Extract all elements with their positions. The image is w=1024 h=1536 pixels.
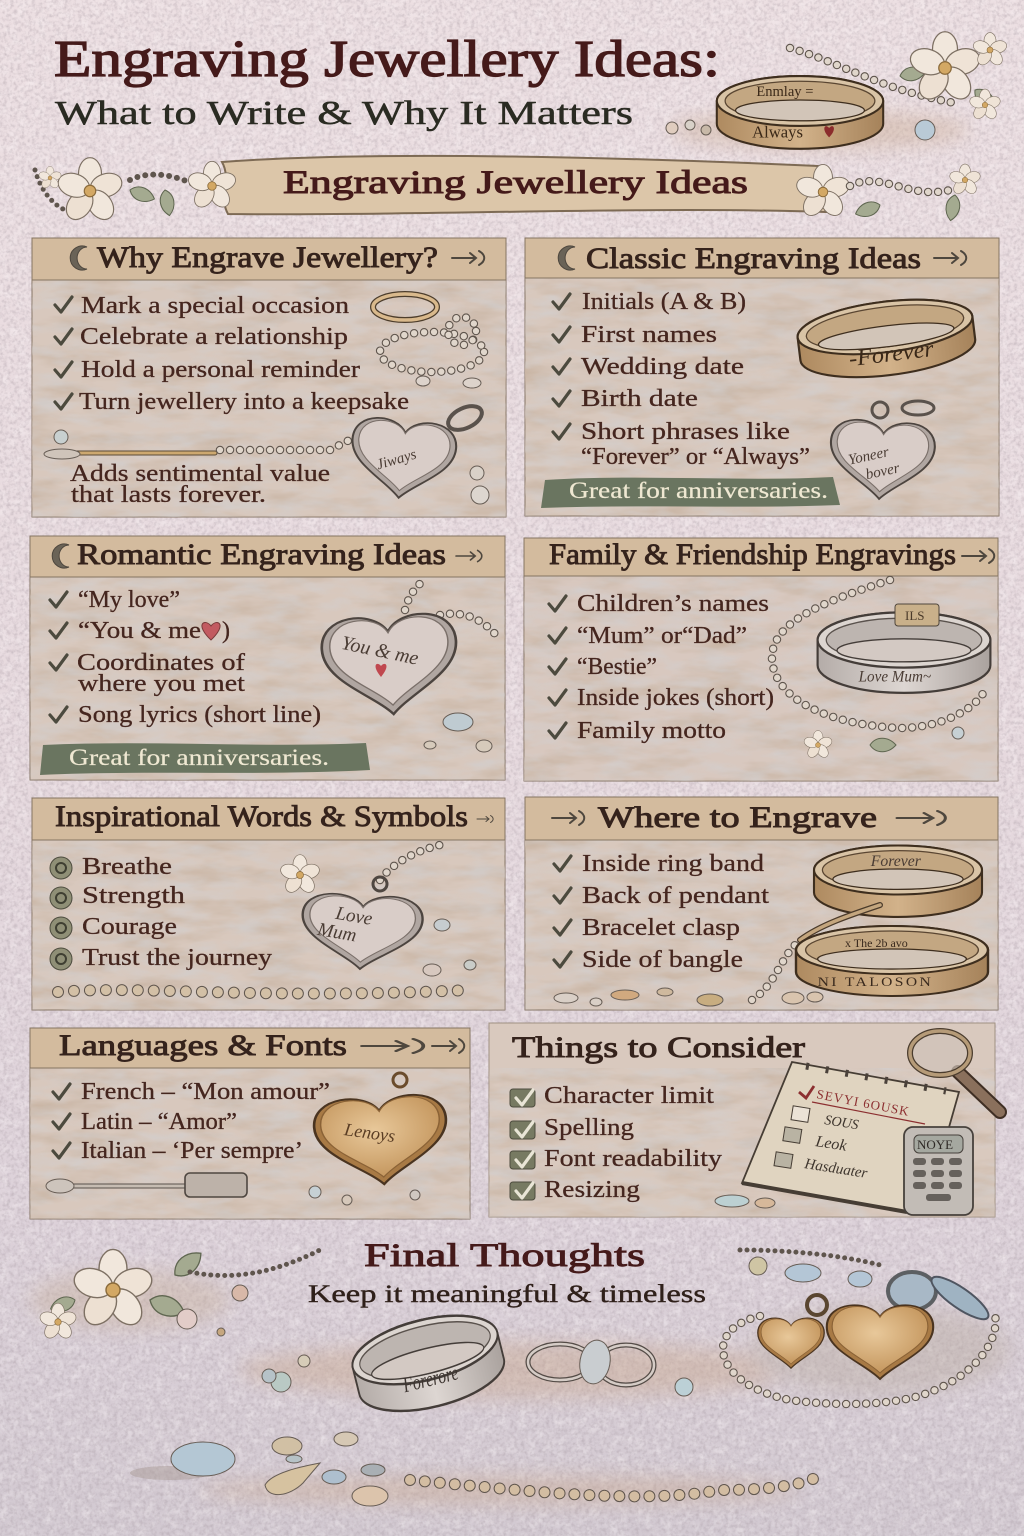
panel: classic engraving ideas <box>525 238 999 516</box>
checklist: French – “Mon amour” <box>81 1079 330 1105</box>
checklist: Celebrate a relationship <box>80 324 348 350</box>
checklist: Side of bangle <box>582 947 743 973</box>
icon: bracelet clasp <box>46 1173 420 1205</box>
icon: gold ring <box>717 76 883 149</box>
checklist: ) <box>222 618 230 644</box>
checklist <box>55 293 409 415</box>
icon: gold chain <box>44 430 365 459</box>
illustration: bottom gems and pebbles <box>130 1432 825 1506</box>
checklist <box>50 587 321 728</box>
final thoughts subtitle: Keep it meaningful & timeless <box>308 1281 706 1308</box>
heading: Things to Consider <box>512 1031 805 1064</box>
panel body <box>30 1028 470 1219</box>
checklist: Inside jokes (short) <box>577 685 774 711</box>
icon: notepad: SEVYI 6OUSK <box>815 1086 911 1119</box>
checklist: Family motto <box>577 718 726 744</box>
checklist: First names <box>581 322 717 348</box>
text: sentimental value note: Adds sentimental value <box>70 461 330 487</box>
icon: calculator <box>904 1127 973 1215</box>
note ribbon <box>541 477 840 508</box>
icon: notepad <box>715 1062 959 1212</box>
checklist: Initials (A & B) <box>582 289 746 315</box>
word list: Trust the journey <box>82 945 272 971</box>
heading: Languages & Fonts <box>59 1029 347 1062</box>
icon: heart pendant Love Mum: Mum <box>315 919 358 946</box>
checklist: “You & me <box>78 618 201 644</box>
subtitle: What to Write & Why It Matters <box>55 95 633 132</box>
icon: bead bracelet and bangle: Love Mum~ <box>858 668 932 686</box>
icon: gold ring Forever: -Forever <box>848 336 936 372</box>
decoration: soft washes <box>30 1270 1010 1504</box>
section banner with flowers <box>35 156 982 225</box>
heading: Where to Engrave <box>598 801 877 834</box>
panel: languages and fonts <box>30 1028 470 1219</box>
icon: bangle with chain: x The 2b avo <box>845 936 908 950</box>
panel body <box>525 797 998 1010</box>
panel: things to consider <box>489 1023 1000 1217</box>
checklist: “Mum” or“Dad” <box>577 623 747 649</box>
checklist: Coordinates of <box>77 650 245 676</box>
icon: heart pendant Love Mum <box>279 845 440 972</box>
word list: Breathe <box>82 854 172 880</box>
word list: Courage <box>82 914 177 940</box>
icon: top ring Forever <box>814 846 982 917</box>
icon: notepad: Hasduater <box>802 1156 869 1182</box>
checklist: Italian – ‘Per sempre’ <box>81 1138 303 1164</box>
icon: clasp <box>373 294 437 320</box>
icon: heart pendant Always: Jiways <box>375 447 419 473</box>
icon: gold ring: Always <box>752 122 803 141</box>
icon: calculator: NOYE <box>917 1137 953 1152</box>
panel: inspirational words and symbols <box>32 798 505 1010</box>
icon: heart pendant: bover <box>864 460 901 483</box>
icon: bead bracelet and bangle: ILS <box>905 608 924 623</box>
illustration: silver rings: Forerore <box>400 1361 461 1398</box>
note ribbon <box>40 743 370 775</box>
note ribbon: Great for anniversaries. <box>569 478 828 503</box>
illustration: silver rings <box>262 1303 693 1424</box>
icon: bangle with chain <box>752 905 988 1000</box>
icon: gold ring: Enmlay = <box>756 84 813 100</box>
final thoughts heading: Final Thoughts <box>364 1238 645 1274</box>
title: Engraving Jewellery Ideas: <box>54 31 720 88</box>
panel body <box>32 798 505 1010</box>
panel: why engrave jewellery <box>32 238 506 517</box>
panel body <box>524 538 998 781</box>
checklist: Character limit <box>544 1083 714 1109</box>
heading: Classic Engraving Ideas <box>586 242 921 275</box>
panel: romantic engraving ideas <box>30 536 505 780</box>
checklist: Back of pendant <box>582 883 769 909</box>
checklist <box>510 1083 722 1203</box>
checklist <box>549 591 774 744</box>
heading: Inspirational Words & Symbols <box>55 800 468 833</box>
text: sentimental value note: that lasts forever. <box>71 482 266 508</box>
checklist <box>554 851 769 973</box>
checklist <box>553 289 810 470</box>
panel body <box>489 1023 995 1217</box>
icon: heart locket You and me <box>320 578 500 752</box>
checklist: Wedding date <box>581 354 744 380</box>
icon: gold heart: Lenoys <box>342 1119 396 1146</box>
panel body <box>30 536 505 780</box>
icon: heart locket You and me: You & me <box>339 632 421 670</box>
checklist: Short phrases like <box>581 419 790 445</box>
icon: bangle with chain: NI TALOSON <box>818 975 933 990</box>
icon: heart pendant Always <box>347 401 489 504</box>
icon: gold ring Forever <box>795 291 978 386</box>
illustration: gold hearts and bead chain <box>723 1250 996 1404</box>
icon: notepad: Leok <box>813 1133 849 1155</box>
icon: gold heart <box>312 1073 450 1189</box>
checklist: Hold a personal reminder <box>81 357 360 383</box>
icon: bead bracelet <box>380 317 484 388</box>
heading: Why Engrave Jewellery? <box>97 241 438 274</box>
illustration: flowers left <box>38 1247 320 1341</box>
decoration: pebble row <box>58 919 476 994</box>
checklist: Children’s names <box>577 591 769 617</box>
icon: heart pendant Love Mum: Love <box>333 903 374 930</box>
checklist: Mark a special occasion <box>81 293 349 319</box>
heading: Family & Friendship Engravings <box>549 538 956 571</box>
note ribbon: Great for anniversaries. <box>69 745 329 770</box>
heading: Romantic Engraving Ideas <box>77 538 446 571</box>
icon: magnifying glass <box>910 1031 1000 1112</box>
checklist: Font readability <box>544 1146 722 1172</box>
panel: where to engrave <box>525 797 998 1010</box>
checklist: Turn jewellery into a keepsake <box>79 389 409 415</box>
checklist: “My love” <box>78 587 180 613</box>
panel body <box>32 238 506 517</box>
decoration: pebbles <box>554 988 823 1006</box>
icon: heart pendant: Yoneer <box>847 444 891 469</box>
illustration: top ring with flowers and beads <box>666 32 1008 150</box>
icon: heart pendant <box>827 401 936 503</box>
word list: Strength <box>82 883 185 909</box>
icon: top ring Forever: Forever <box>870 853 922 870</box>
checklist: Inside ring band <box>582 851 764 877</box>
checklist: “Forever” or “Always” <box>581 444 810 470</box>
checklist: Bracelet clasp <box>582 915 740 941</box>
icon: bead bracelet and bangle <box>772 580 990 760</box>
checklist: Resizing <box>544 1177 640 1203</box>
checklist <box>53 1079 330 1164</box>
checklist: Spelling <box>544 1115 634 1141</box>
word list <box>50 854 272 971</box>
banner heading: Engraving Jewellery Ideas <box>283 165 748 201</box>
checklist: Birth date <box>581 386 698 412</box>
checklist: where you met <box>78 671 245 697</box>
text: sentimental value note <box>70 461 330 508</box>
panel: family and friendship engravings <box>524 538 998 781</box>
checklist: Song lyrics (short line) <box>78 702 321 728</box>
checklist: “Bestie” <box>577 654 657 680</box>
icon: notepad: SOUS <box>823 1113 860 1133</box>
checklist: Latin – “Amor” <box>81 1109 237 1135</box>
panel body <box>525 238 999 516</box>
